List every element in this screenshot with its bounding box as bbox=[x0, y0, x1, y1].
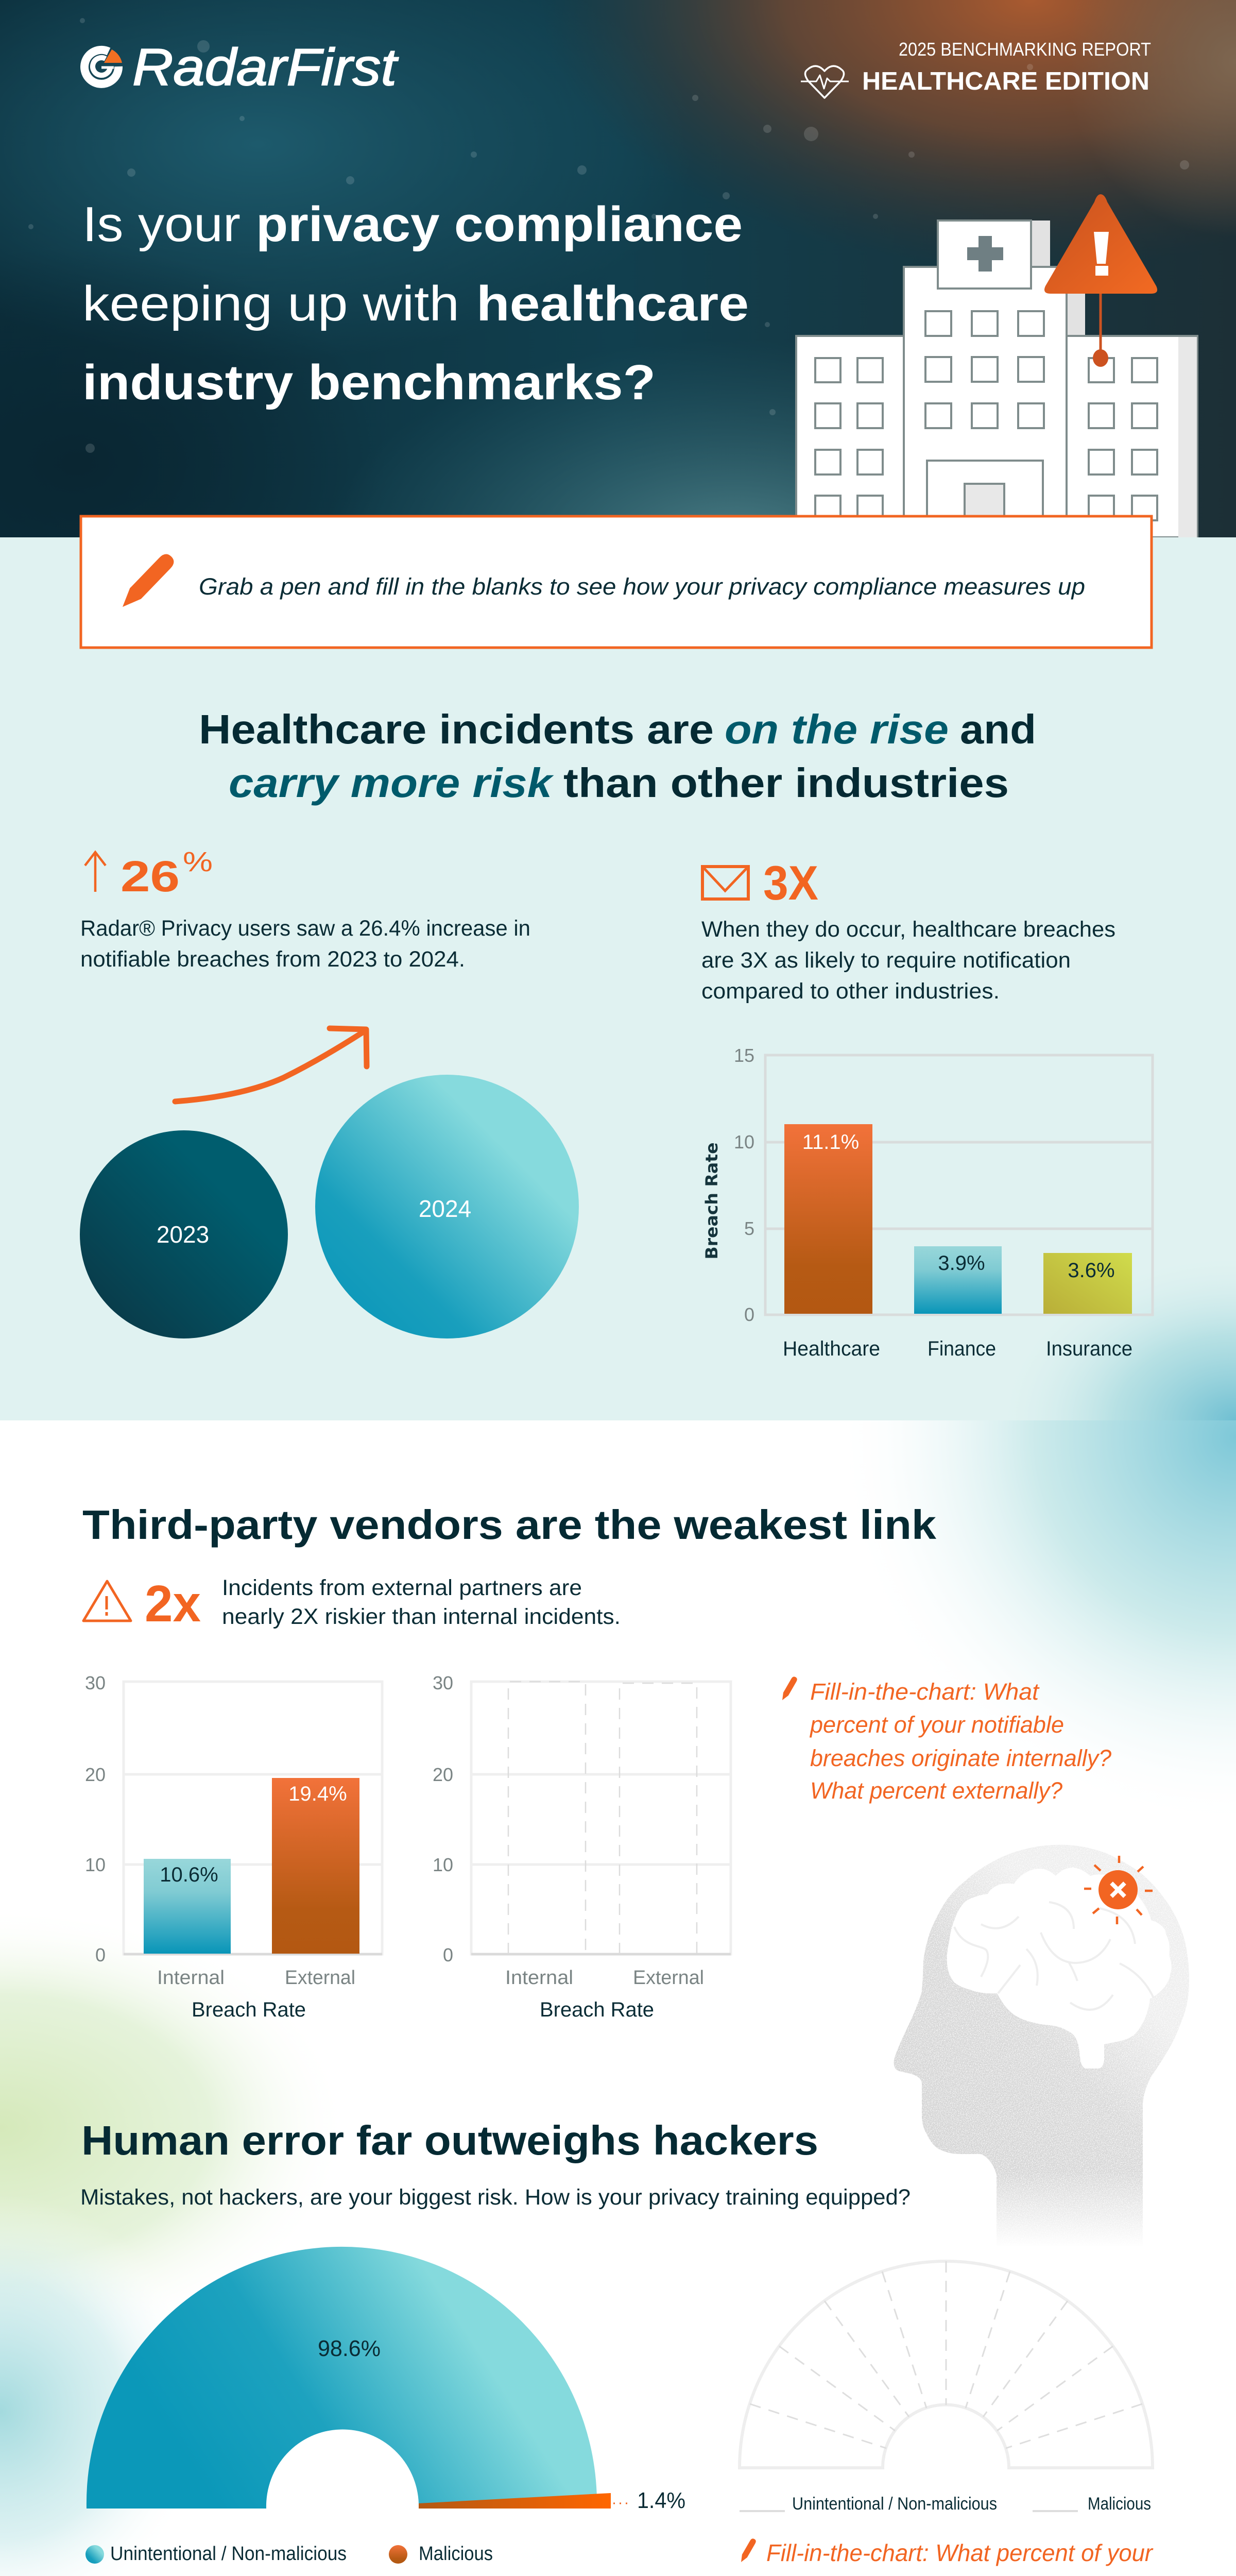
chart: blank fill-in bars: 0 bbox=[443, 1944, 453, 1965]
chart: half donut unintentional vs malicious: 1.4% bbox=[637, 2488, 685, 2513]
logo: RadarFirst bbox=[132, 39, 399, 96]
chart: blank fill-in bars: 10 bbox=[433, 1854, 453, 1875]
stat: 26 percent bbox=[85, 846, 213, 901]
legend: half donut: Malicious bbox=[419, 2543, 493, 2565]
chart: internal vs external breach rate: 19.4% bbox=[288, 1783, 347, 1805]
chart: half donut unintentional vs malicious bbox=[87, 2247, 685, 2513]
chart: internal vs external breach rate: 30 bbox=[85, 1672, 106, 1693]
chart: breach rate by industry: 15 bbox=[734, 1045, 754, 1066]
chart: internal vs external breach rate: 10 bbox=[85, 1854, 106, 1875]
legend: blank half donut: Malicious bbox=[1088, 2494, 1151, 2514]
chart: breach rate by industry: 11.1% bbox=[802, 1131, 859, 1154]
title: Is your bbox=[82, 197, 241, 252]
chart: half donut unintentional vs malicious: 98.6% bbox=[318, 2336, 381, 2361]
report edition label: 2025 BENCHMARKING REPORT bbox=[899, 39, 1151, 60]
legend: half donut: Unintentional / Non-malicious bbox=[110, 2543, 347, 2565]
panel: section 2 background bbox=[0, 1420, 1236, 2576]
stat: 26 percent: 26 bbox=[121, 852, 180, 901]
text: radar privacy increase: Radar® Privacy users saw a 26.4% increase in bbox=[80, 916, 530, 941]
icon: alert triangle bbox=[1044, 194, 1157, 367]
title: industry benchmarks? bbox=[82, 355, 656, 410]
legend: half donut bbox=[85, 2543, 493, 2565]
report edition label: HEALTHCARE EDITION bbox=[862, 67, 1149, 95]
chart: blank fill-in bars: Internal bbox=[505, 1967, 573, 1989]
title: privacy compliance bbox=[256, 197, 743, 252]
stat: 2x riskier: nearly 2X riskier than internal incidents. bbox=[222, 1604, 621, 1629]
text: 3X notification bbox=[701, 917, 1115, 1004]
chart: blank half donut bbox=[740, 2261, 1153, 2468]
chart: breach rate by industry: Breach Rate bbox=[702, 1143, 722, 1259]
chart: breach rate by industry: Insurance bbox=[1046, 1337, 1132, 1360]
callout: fill-in-the-chart vendors: breaches originate internally? bbox=[810, 1745, 1111, 1771]
text: 3X notification: When they do occur, healthcare breaches bbox=[701, 917, 1115, 942]
chart: internal vs external breach rate: External bbox=[285, 1967, 355, 1989]
heading: incidents on the rise: Healthcare incidents are bbox=[199, 706, 714, 752]
chart: 2023 vs 2024 circles bbox=[80, 1075, 579, 1338]
chart: breach rate by industry: 3.9% bbox=[938, 1252, 985, 1275]
panel: hero bbox=[0, 0, 1236, 537]
heading: incidents on the rise bbox=[199, 706, 1036, 806]
heading: incidents on the rise: on the rise bbox=[725, 706, 949, 752]
legend: blank half donut bbox=[740, 2494, 1151, 2514]
chart: blank fill-in bars bbox=[433, 1672, 731, 2021]
panel: section 1 background bbox=[0, 537, 1236, 1420]
chart: blank fill-in bars: Breach Rate bbox=[540, 1998, 654, 2021]
text: radar privacy increase: notifiable breaches from 2023 to 2024. bbox=[80, 947, 465, 972]
stat: 3X bbox=[702, 856, 818, 910]
heading: human error: Human error far outweighs hackers bbox=[81, 2117, 818, 2163]
chart: internal vs external breach rate: Breach Rate bbox=[192, 1998, 306, 2021]
callout: fill-in-the-chart vendors: percent of your notifiable bbox=[809, 1711, 1064, 1738]
legend: blank half donut: Unintentional / Non-malicious bbox=[792, 2494, 997, 2514]
callout: fill-in-the-chart malicious: Fill-in-the-chart: What percent of your bbox=[766, 2539, 1154, 2566]
title: keeping up with bbox=[82, 276, 459, 331]
icon: hospital building bbox=[796, 221, 1197, 537]
heading: incidents on the rise: carry more risk bbox=[229, 760, 554, 806]
chart: internal vs external breach rate: 0 bbox=[95, 1944, 106, 1965]
title bbox=[82, 197, 749, 410]
chart: breach rate by industry: 0 bbox=[744, 1304, 754, 1325]
chart: 2023 vs 2024 circles: 2023 bbox=[157, 1221, 209, 1248]
text: 3X notification: compared to other industries. bbox=[701, 979, 1000, 1004]
chart: internal vs external breach rate: Internal bbox=[157, 1967, 225, 1989]
chart: breach rate by industry bbox=[702, 1045, 1153, 1360]
callout: fill in the blanks: Grab a pen and fill in the blanks to see how your privacy compliance measures up bbox=[199, 573, 1085, 600]
chart: breach rate by industry: Finance bbox=[928, 1337, 996, 1360]
chart: internal vs external breach rate: 20 bbox=[85, 1764, 106, 1785]
chart: internal vs external breach rate bbox=[85, 1672, 382, 2021]
heading: incidents on the rise: and bbox=[960, 706, 1036, 752]
stat: 2x riskier: Incidents from external partners are bbox=[222, 1575, 582, 1600]
chart: blank fill-in bars: 30 bbox=[433, 1672, 453, 1693]
stat: 3X: 3X bbox=[763, 856, 818, 910]
chart: 2023 vs 2024 circles: 2024 bbox=[419, 1195, 471, 1222]
chart: internal vs external breach rate: 10.6% bbox=[160, 1863, 218, 1886]
callout: fill-in-the-chart vendors bbox=[780, 1675, 1111, 1804]
report edition label bbox=[862, 39, 1151, 95]
text: radar privacy increase bbox=[80, 916, 530, 972]
chart: breach rate by industry: 5 bbox=[744, 1218, 754, 1239]
callout: fill-in-the-chart vendors: Fill-in-the-chart: What bbox=[810, 1679, 1040, 1705]
title: healthcare bbox=[476, 276, 749, 331]
chart: breach rate by industry: 3.6% bbox=[1068, 1259, 1115, 1282]
stat: 2x riskier bbox=[83, 1575, 621, 1633]
heading: third-party vendors: Third-party vendors are the weakest link bbox=[82, 1502, 937, 1548]
chart: blank fill-in bars: 20 bbox=[433, 1764, 453, 1785]
icon: heart with pulse bbox=[801, 66, 849, 98]
chart: breach rate by industry: 10 bbox=[734, 1131, 754, 1153]
callout: fill-in-the-chart vendors: What percent externally? bbox=[810, 1777, 1062, 1804]
callout: fill-in-the-chart malicious bbox=[739, 2537, 1154, 2576]
stat: 2x riskier: 2x bbox=[145, 1575, 201, 1633]
chart: blank fill-in bars: External bbox=[633, 1967, 704, 1989]
text: 3X notification: are 3X as likely to require notification bbox=[701, 948, 1071, 973]
icon: head with brain bbox=[894, 1845, 1189, 2247]
heading: incidents on the rise: than other industries bbox=[563, 760, 1009, 806]
text: mistakes: Mistakes, not hackers, are your biggest risk. How is your privacy training equipped? bbox=[80, 2185, 911, 2210]
callout: fill in the blanks bbox=[81, 516, 1152, 648]
stat: 26 percent: % bbox=[183, 846, 213, 877]
chart: breach rate by industry: Healthcare bbox=[783, 1337, 880, 1360]
arrow: rising bbox=[175, 1028, 367, 1101]
